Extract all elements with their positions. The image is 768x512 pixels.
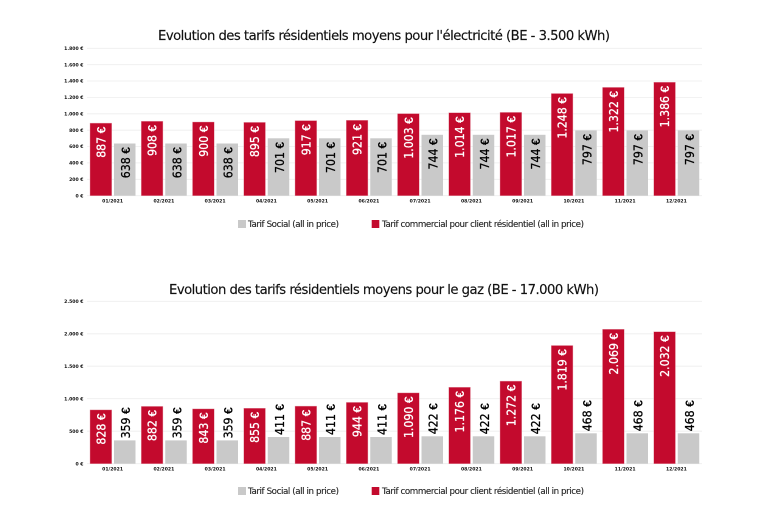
bars: electricity 08/2021: 744 €: [478, 138, 492, 169]
bars: gas 11/2021: 2.069 €: [607, 333, 621, 374]
bars: gas 01/2021: 359 €: [119, 407, 133, 438]
bars: gas 07/2021: 07/2021: [410, 466, 431, 472]
bars: electricity 01/2021: [90, 123, 136, 204]
bars: gas 06/2021: [346, 402, 392, 472]
bars: gas 03/2021: 359 €: [222, 407, 236, 438]
bars: electricity 04/2021: 701 €: [273, 142, 287, 173]
y axis labels: electricity: 1.800 €: [64, 46, 84, 52]
bars: electricity 12/2021: 1.386 €: [658, 85, 672, 127]
legend: electricity: Tarif commercial pour client résidentiel (all in price): [381, 219, 584, 230]
bars: gas 10/2021: 468 €: [580, 400, 594, 431]
bars: gas 09/2021: 422 €: [529, 403, 543, 434]
bars: electricity 03/2021: [192, 122, 238, 204]
bars: gas 08/2021: 422 €: [478, 403, 492, 434]
bars: electricity 04/2021: 895 €: [248, 126, 262, 157]
bars: gas 02/2021: 02/2021: [153, 466, 174, 472]
legend: gas: [238, 486, 584, 497]
bars: electricity 08/2021: 1.014 €: [453, 116, 467, 158]
bars: electricity 05/2021: 05/2021: [307, 198, 328, 204]
bars: electricity 11/2021: 11/2021: [615, 198, 636, 204]
y axis labels: gas: 1.000 €: [64, 396, 84, 402]
bars: electricity 10/2021: [551, 94, 597, 204]
bars: electricity 02/2021: 908 €: [146, 125, 160, 156]
legend: gas: Tarif commercial pour client résidentiel (all in price): [381, 486, 584, 497]
y axis labels: electricity: [64, 46, 84, 199]
bars: gas 02/2021: 359 €: [170, 407, 184, 438]
bars: electricity 04/2021: [244, 122, 289, 204]
bars: electricity 03/2021: 03/2021: [205, 198, 226, 204]
bars: electricity 05/2021: 917 €: [299, 124, 313, 155]
title: gas chart: Evolution des tarifs résidentiels moyens pour le gaz (BE - 17.000 kWh): [169, 282, 599, 298]
y axis labels: electricity: 1.000 €: [64, 112, 84, 118]
bars: gas 01/2021: 828 €: [94, 413, 108, 445]
bars: gas 07/2021: 1.090 €: [402, 396, 416, 438]
bars: gas 11/2021: 468 €: [632, 400, 646, 431]
bars: electricity 07/2021: 744 €: [426, 138, 440, 169]
bars: gas 09/2021: 09/2021: [512, 466, 533, 472]
y axis labels: gas: 2.000 €: [64, 332, 84, 338]
y axis labels: electricity: 600 €: [69, 144, 84, 150]
y axis labels: electricity: 0 €: [76, 193, 84, 199]
bars: gas 08/2021: 1.176 €: [453, 391, 467, 432]
bars: electricity 06/2021: 06/2021: [358, 198, 379, 204]
y axis labels: electricity: 1.400 €: [64, 79, 84, 85]
bars: gas 09/2021: [500, 381, 546, 472]
bars: gas 12/2021: 468 €: [683, 400, 697, 431]
y axis labels: electricity: 400 €: [69, 161, 84, 167]
bars: electricity 12/2021: 797 €: [683, 134, 697, 165]
bars: gas 10/2021: [551, 346, 597, 472]
bars: electricity 07/2021: [398, 114, 443, 204]
bars: gas 04/2021: 855 €: [248, 411, 262, 443]
bars: gas 07/2021: [398, 393, 443, 472]
bars: gas 10/2021: 10/2021: [563, 466, 584, 472]
y axis labels: gas: 2.500 €: [64, 299, 84, 305]
bars: gas 03/2021: [192, 407, 238, 472]
y axis labels: electricity: 1.600 €: [64, 62, 84, 68]
bars: gas 06/2021: 411 €: [375, 404, 389, 435]
bars: gas 04/2021: [244, 404, 289, 472]
bars: gas 09/2021: 1.272 €: [504, 384, 518, 426]
legend: electricity: [238, 219, 584, 230]
bars: electricity 04/2021: 04/2021: [256, 198, 277, 204]
bars: electricity 11/2021: [602, 87, 648, 204]
bars: electricity 09/2021: 1.017 €: [504, 116, 518, 158]
y axis labels: gas: 0 €: [76, 461, 84, 467]
bars: gas 10/2021: 1.819 €: [556, 349, 570, 391]
bars: electricity 09/2021: [500, 112, 546, 204]
bars: gas 08/2021: [449, 387, 494, 472]
bars: gas 06/2021: 944 €: [351, 406, 365, 437]
bars: electricity 10/2021: 1.248 €: [556, 97, 570, 139]
bars: gas 04/2021: 04/2021: [256, 466, 277, 472]
bars: electricity 09/2021: 744 €: [529, 138, 543, 169]
bars: electricity 01/2021: 887 €: [94, 126, 108, 158]
bars: electricity 11/2021: 1.322 €: [607, 91, 621, 133]
bars: electricity 05/2021: 701 €: [324, 142, 338, 173]
bars: electricity 06/2021: [346, 120, 392, 204]
bars: electricity 09/2021: 09/2021: [512, 198, 533, 204]
y axis labels: electricity: 1.200 €: [64, 95, 84, 101]
bars: gas 01/2021: [90, 407, 136, 472]
legend: gas: Tarif Social (all in price): [247, 487, 339, 497]
bars: gas 11/2021: 11/2021: [615, 466, 636, 472]
bars: gas 02/2021: 882 €: [146, 410, 160, 441]
y axis labels: gas: [64, 299, 84, 467]
y axis labels: gas: 1.500 €: [64, 364, 84, 370]
bars: electricity 05/2021: [295, 121, 340, 204]
bars: gas 12/2021: 12/2021: [666, 466, 687, 472]
chart: gas tariffs: [64, 282, 702, 497]
bars: electricity 12/2021: 12/2021: [666, 198, 687, 204]
bars: electricity 10/2021: 10/2021: [563, 198, 584, 204]
bars: electricity 07/2021: 1.003 €: [402, 117, 416, 159]
bars: gas 05/2021: [295, 404, 340, 472]
bars: gas 02/2021: [141, 406, 187, 472]
bars: electricity 03/2021: 638 €: [222, 147, 236, 178]
bars: gas 01/2021: 01/2021: [102, 466, 123, 472]
bars: gas 04/2021: 411 €: [273, 404, 287, 435]
bars: electricity 06/2021: 921 €: [351, 124, 365, 155]
bars: electricity 01/2021: 638 €: [119, 147, 133, 178]
title: electricity chart: Evolution des tarifs résidentiels moyens pour l'électricité (BE - 3.500 kWh): [158, 28, 610, 44]
bars: electricity 01/2021: 01/2021: [102, 198, 123, 204]
bars: gas 12/2021: 2.032 €: [658, 335, 672, 377]
bars: electricity 08/2021: 08/2021: [461, 198, 482, 204]
bars: gas 11/2021: [602, 329, 648, 472]
bars: gas 12/2021: [654, 332, 699, 472]
bars: gas 05/2021: 05/2021: [307, 466, 328, 472]
bars: electricity 10/2021: 797 €: [580, 134, 594, 165]
bars: gas 06/2021: 06/2021: [358, 466, 379, 472]
bars: gas 03/2021: 843 €: [197, 412, 211, 444]
legend: electricity: Tarif Social (all in price): [247, 220, 339, 230]
bars: electricity 12/2021: [654, 82, 699, 204]
chart: electricity tariffs: [64, 28, 702, 230]
bars: electricity 06/2021: 701 €: [375, 142, 389, 173]
bars: gas 07/2021: 422 €: [426, 403, 440, 434]
bars: electricity 02/2021: 638 €: [170, 147, 184, 178]
y axis labels: electricity: 800 €: [69, 128, 84, 134]
bars: electricity 02/2021: [141, 121, 187, 204]
bars: electricity 11/2021: 797 €: [632, 134, 646, 165]
bars: gas 03/2021: 03/2021: [205, 466, 226, 472]
bars: gas 05/2021: 411 €: [324, 404, 338, 435]
bars: electricity 02/2021: 02/2021: [153, 198, 174, 204]
y axis labels: electricity: 200 €: [69, 177, 84, 183]
bars: electricity 07/2021: 07/2021: [410, 198, 431, 204]
bars: gas 08/2021: 08/2021: [461, 466, 482, 472]
bars: gas 05/2021: 887 €: [299, 409, 313, 441]
bars: electricity 08/2021: [449, 113, 494, 204]
y axis labels: gas: 500 €: [69, 429, 84, 435]
bars: electricity 03/2021: 900 €: [197, 125, 211, 157]
